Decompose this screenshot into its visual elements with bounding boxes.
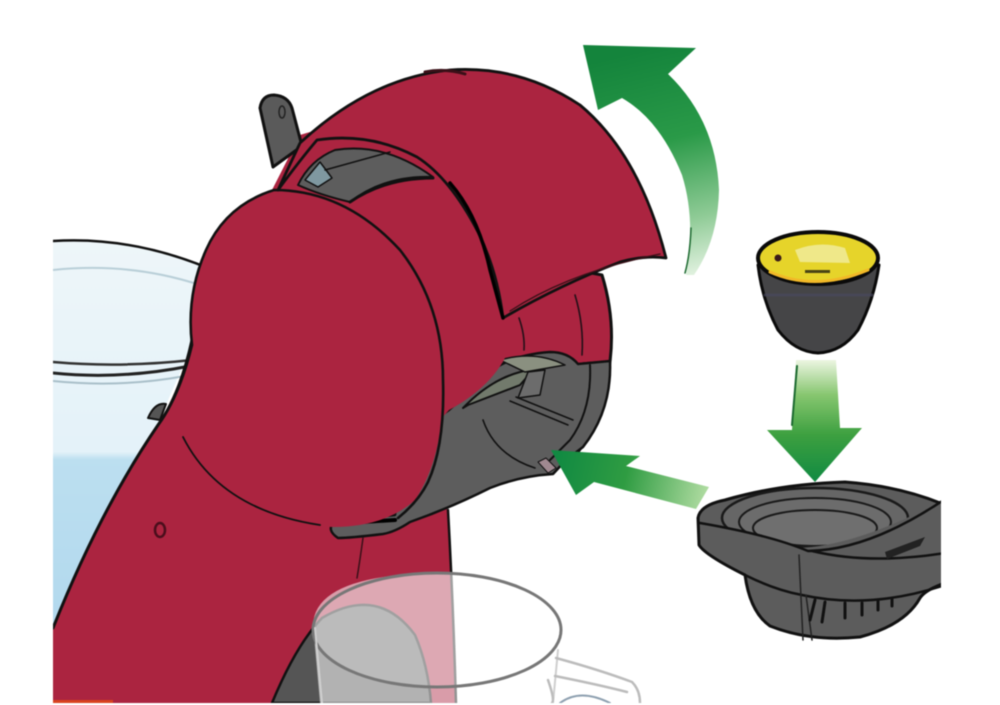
middle hood band: [272, 127, 515, 420]
water tank: [53, 240, 208, 625]
body details: ring and seam: [155, 523, 363, 578]
coffee capsule: [758, 232, 879, 353]
bottom edge tint: [53, 700, 113, 703]
arrow: remove holder: [551, 450, 709, 509]
lever: [260, 95, 302, 167]
front cover oval: [183, 190, 443, 527]
capsule slot opening: [298, 149, 433, 202]
arrow: drop capsule into holder: [767, 360, 862, 482]
rear body seam lines: [518, 294, 584, 362]
capsule holder: [698, 482, 945, 640]
front cover outline: [158, 190, 443, 525]
capsule holder chute: [331, 352, 610, 538]
drip tray recess: [272, 605, 431, 703]
flip-up lid: [278, 69, 666, 318]
machine lower body: [53, 340, 456, 703]
glass cup: [313, 573, 640, 703]
arrow: lift lid upward: [583, 45, 719, 275]
rear machine body: [502, 272, 614, 453]
